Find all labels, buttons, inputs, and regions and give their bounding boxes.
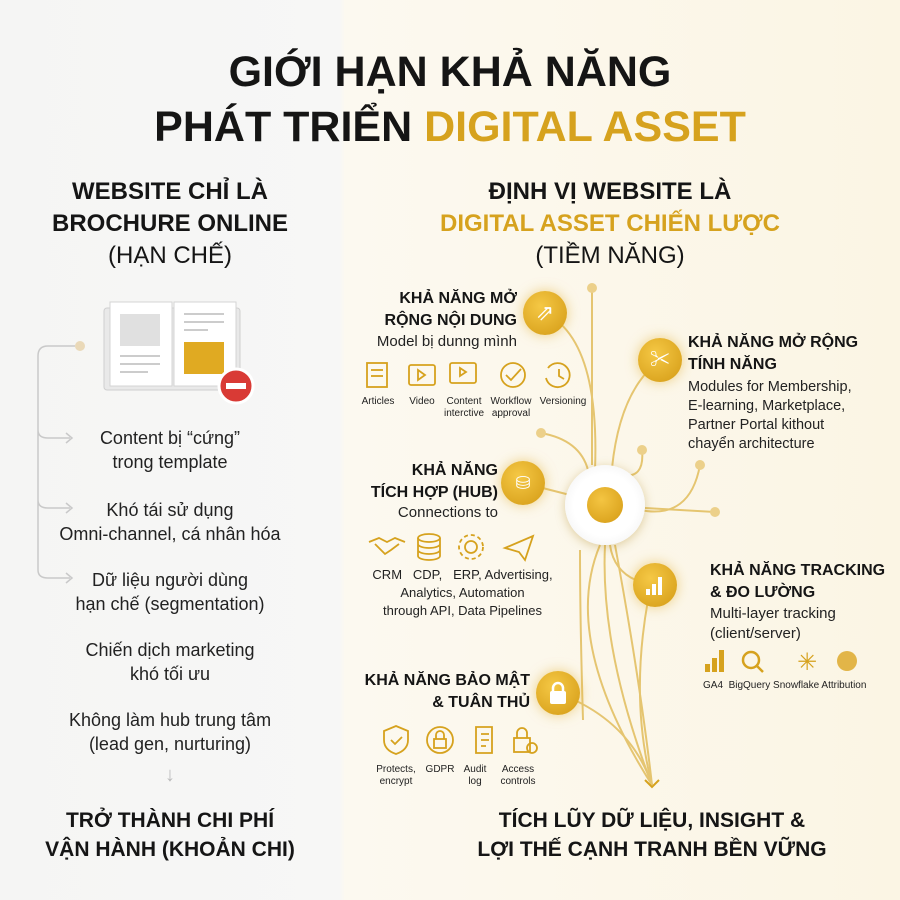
node: hub integration: TÍCH HỢP (HUB) xyxy=(371,484,498,501)
node: features: chayển architecture xyxy=(688,436,815,452)
right heading: ĐỊNH VỊ WEBSITE LÀ xyxy=(489,178,731,205)
left conclusion xyxy=(45,808,295,861)
node: security xyxy=(365,663,588,787)
node: tracking: ✳ xyxy=(797,648,817,676)
node: features: TÍNH NĂNG xyxy=(688,356,777,373)
left heading: WEBSITE CHỈ LÀ xyxy=(72,178,268,205)
node: features: KHẢ NĂNG MỞ RỘNG xyxy=(688,334,858,351)
node: hub integration: Connections to xyxy=(398,504,498,521)
node: hub integration xyxy=(371,453,553,521)
right heading: (TIỀM NĂNG) xyxy=(535,242,685,269)
right conclusion xyxy=(477,808,827,861)
left item 4 xyxy=(85,640,255,684)
left item 5 xyxy=(69,710,271,754)
left item 2: Khó tái sử dụng xyxy=(106,500,234,520)
node: content: KHẢ NĂNG MỞ xyxy=(399,290,517,307)
content sub-icons: Video xyxy=(409,396,435,407)
hub sub-icons: Analytics, Automation xyxy=(400,585,525,600)
content sub-icons: Versioning xyxy=(540,396,586,407)
content sub-icons: Articles xyxy=(362,396,394,407)
left item 3: hạn chế (segmentation) xyxy=(75,594,265,614)
left item 3 xyxy=(75,570,265,614)
title: PHÁT TRIỂN DIGITAL ASSET xyxy=(154,103,746,151)
node: content: Model bị dunng mình xyxy=(377,333,517,350)
right conclusion: TÍCH LŨY DỮ LIỆU, INSIGHT & xyxy=(499,809,805,832)
right heading: DIGITAL ASSET CHIẾN LƯỢC xyxy=(440,210,780,237)
node: features: ✂ xyxy=(650,349,670,371)
node: features: Modules for Membership, xyxy=(688,379,852,395)
left item 1: Content bị “cứng” xyxy=(100,428,240,448)
node: tracking: (client/server) xyxy=(710,625,801,642)
node: tracking xyxy=(625,555,885,691)
node: tracking: GA4 BigQuery Snowflake Attribution xyxy=(703,680,866,691)
left item 1: trong template xyxy=(112,452,228,472)
node: features xyxy=(630,330,858,452)
left item 3: Dữ liệu người dùng xyxy=(92,570,248,590)
node: hub integration: KHẢ NĂNG xyxy=(412,462,498,479)
left item 2 xyxy=(59,500,281,544)
left item 5: (lead gen, nurturing) xyxy=(89,734,251,754)
node: tracking: KHẢ NĂNG TRACKING xyxy=(710,562,885,579)
node: security: GDPR xyxy=(426,764,454,775)
node: security: KHẢ NĂNG BẢO MẬT xyxy=(365,672,530,689)
left heading xyxy=(52,177,288,269)
left item 4: khó tối ưu xyxy=(130,664,210,684)
node: security: Access controls xyxy=(500,764,536,787)
node: hub integration: ⛁ xyxy=(515,473,531,493)
node: features: Partner Portal kithout xyxy=(688,417,824,433)
hub sub-icons: through API, Data Pipelines xyxy=(383,603,542,618)
title: GIỚI HẠN KHẢ NĂNG xyxy=(229,48,671,96)
node: tracking: Multi-layer tracking xyxy=(710,605,836,622)
content sub-icons xyxy=(362,362,586,419)
right conclusion: LỢI THẾ CẠNH TRANH BỀN VỮNG xyxy=(477,838,827,861)
node: tracking: & ĐO LƯỜNG xyxy=(710,584,815,601)
center hub xyxy=(565,465,645,545)
node: content xyxy=(377,283,575,350)
left heading: BROCHURE ONLINE xyxy=(52,210,288,237)
hub sub-icons: CRM CDP, ERP, Advertising, xyxy=(372,567,553,582)
left conclusion: TRỞ THÀNH CHI PHÍ xyxy=(66,809,274,832)
content sub-icons: Content interctive xyxy=(444,396,484,419)
icon: open book xyxy=(104,302,254,404)
right heading xyxy=(440,178,780,269)
hub sub-icons xyxy=(368,533,553,618)
node: content: RỘNG NỘI DUNG xyxy=(385,312,517,329)
left heading: (HẠN CHẾ) xyxy=(108,242,232,269)
left item 1 xyxy=(100,428,240,472)
bracket connector xyxy=(37,341,85,584)
node: security: Audit log xyxy=(464,764,486,787)
network curves xyxy=(536,283,720,788)
title xyxy=(154,48,746,151)
left item 2: Omni-channel, cá nhân hóa xyxy=(59,524,281,544)
node: security: Protects, encrypt xyxy=(376,764,416,787)
left item 4: Chiến dịch marketing xyxy=(85,640,255,660)
node: features: E-learning, Marketplace, xyxy=(688,398,845,414)
left item 5: Không làm hub trung tâm xyxy=(69,710,271,730)
arrow down left: ↓ xyxy=(165,764,175,786)
left conclusion: VẬN HÀNH (KHOẢN CHI) xyxy=(45,838,295,861)
content sub-icons: Workflow approval xyxy=(491,396,531,419)
node: content: ⇗ xyxy=(536,300,554,325)
node: security: & TUÂN THỦ xyxy=(432,694,530,711)
